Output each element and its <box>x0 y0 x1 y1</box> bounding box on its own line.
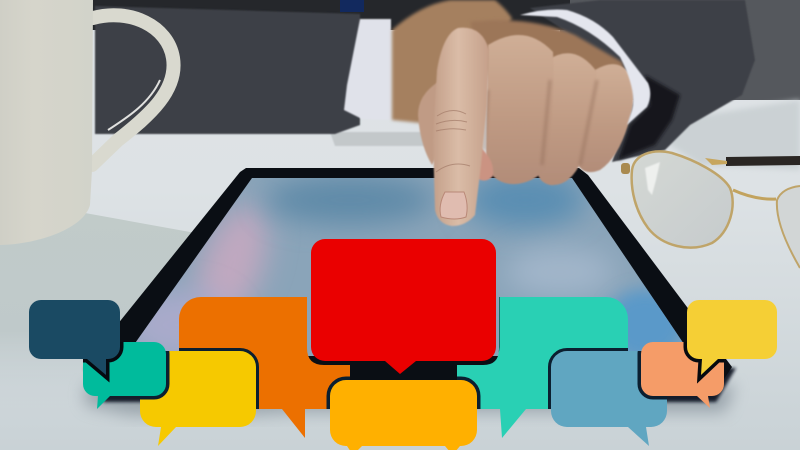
index fingernail <box>440 192 467 219</box>
screen base colour <box>136 178 682 356</box>
left lens reflection <box>645 162 660 195</box>
bubble: steel blue right <box>551 351 667 446</box>
hand pointing at tablet <box>392 0 634 226</box>
white shirt cuff left <box>344 19 391 120</box>
bubble: red centre <box>311 239 496 374</box>
far desk shading right <box>640 100 800 170</box>
bubble: peach right <box>641 342 724 408</box>
right lens <box>777 186 800 268</box>
back wall <box>560 0 800 100</box>
mug body <box>0 0 93 245</box>
black temple arm <box>726 156 800 166</box>
little finger <box>578 64 634 172</box>
back of hand <box>470 20 632 110</box>
blue tie sliver <box>340 0 364 12</box>
screen light haze <box>505 248 615 296</box>
bubble: orange <box>179 297 350 438</box>
screen right blue <box>465 172 585 228</box>
eyeglasses <box>621 151 800 268</box>
screen pink glow <box>186 196 280 298</box>
gold temple hinge <box>705 158 727 165</box>
coffee mug <box>0 0 174 245</box>
knuckle creases <box>436 110 470 172</box>
left suit sleeve <box>95 6 360 134</box>
sleeve dark fold <box>618 75 680 160</box>
middle finger <box>486 35 554 184</box>
screen top blue <box>265 176 435 224</box>
bubble: amber bottom centre <box>330 380 477 450</box>
bubble: teal left <box>83 342 166 409</box>
bridge <box>733 190 776 199</box>
right suit sleeve <box>530 0 755 162</box>
mug handle highlight <box>108 80 160 130</box>
near desk shadow under mug <box>0 213 260 410</box>
tablet soft shadow <box>85 385 735 415</box>
bubble: yellow left <box>140 351 256 446</box>
bubble: navy top left <box>29 300 120 375</box>
tablet underside <box>84 368 736 402</box>
tablet screen <box>136 178 682 356</box>
ring finger <box>537 53 597 185</box>
curled finger tip <box>476 147 493 181</box>
tablet device <box>84 168 732 382</box>
white shirt cuff right <box>520 10 650 125</box>
mug handle <box>92 15 174 165</box>
screen lower right blue <box>610 282 682 351</box>
speech bubbles cluster <box>29 239 777 450</box>
dark torso <box>90 0 570 30</box>
left lens <box>632 151 733 248</box>
tablet bezel <box>84 168 732 382</box>
finger gaps <box>484 80 597 165</box>
forearm and wrist <box>392 0 512 125</box>
bubble: mint <box>457 297 628 438</box>
bubble: yellow top right <box>687 300 777 375</box>
index finger <box>433 28 489 226</box>
far desk band <box>330 132 430 146</box>
hinge post <box>621 163 630 174</box>
screen lavender glow <box>136 278 200 351</box>
thumb side <box>418 82 440 165</box>
